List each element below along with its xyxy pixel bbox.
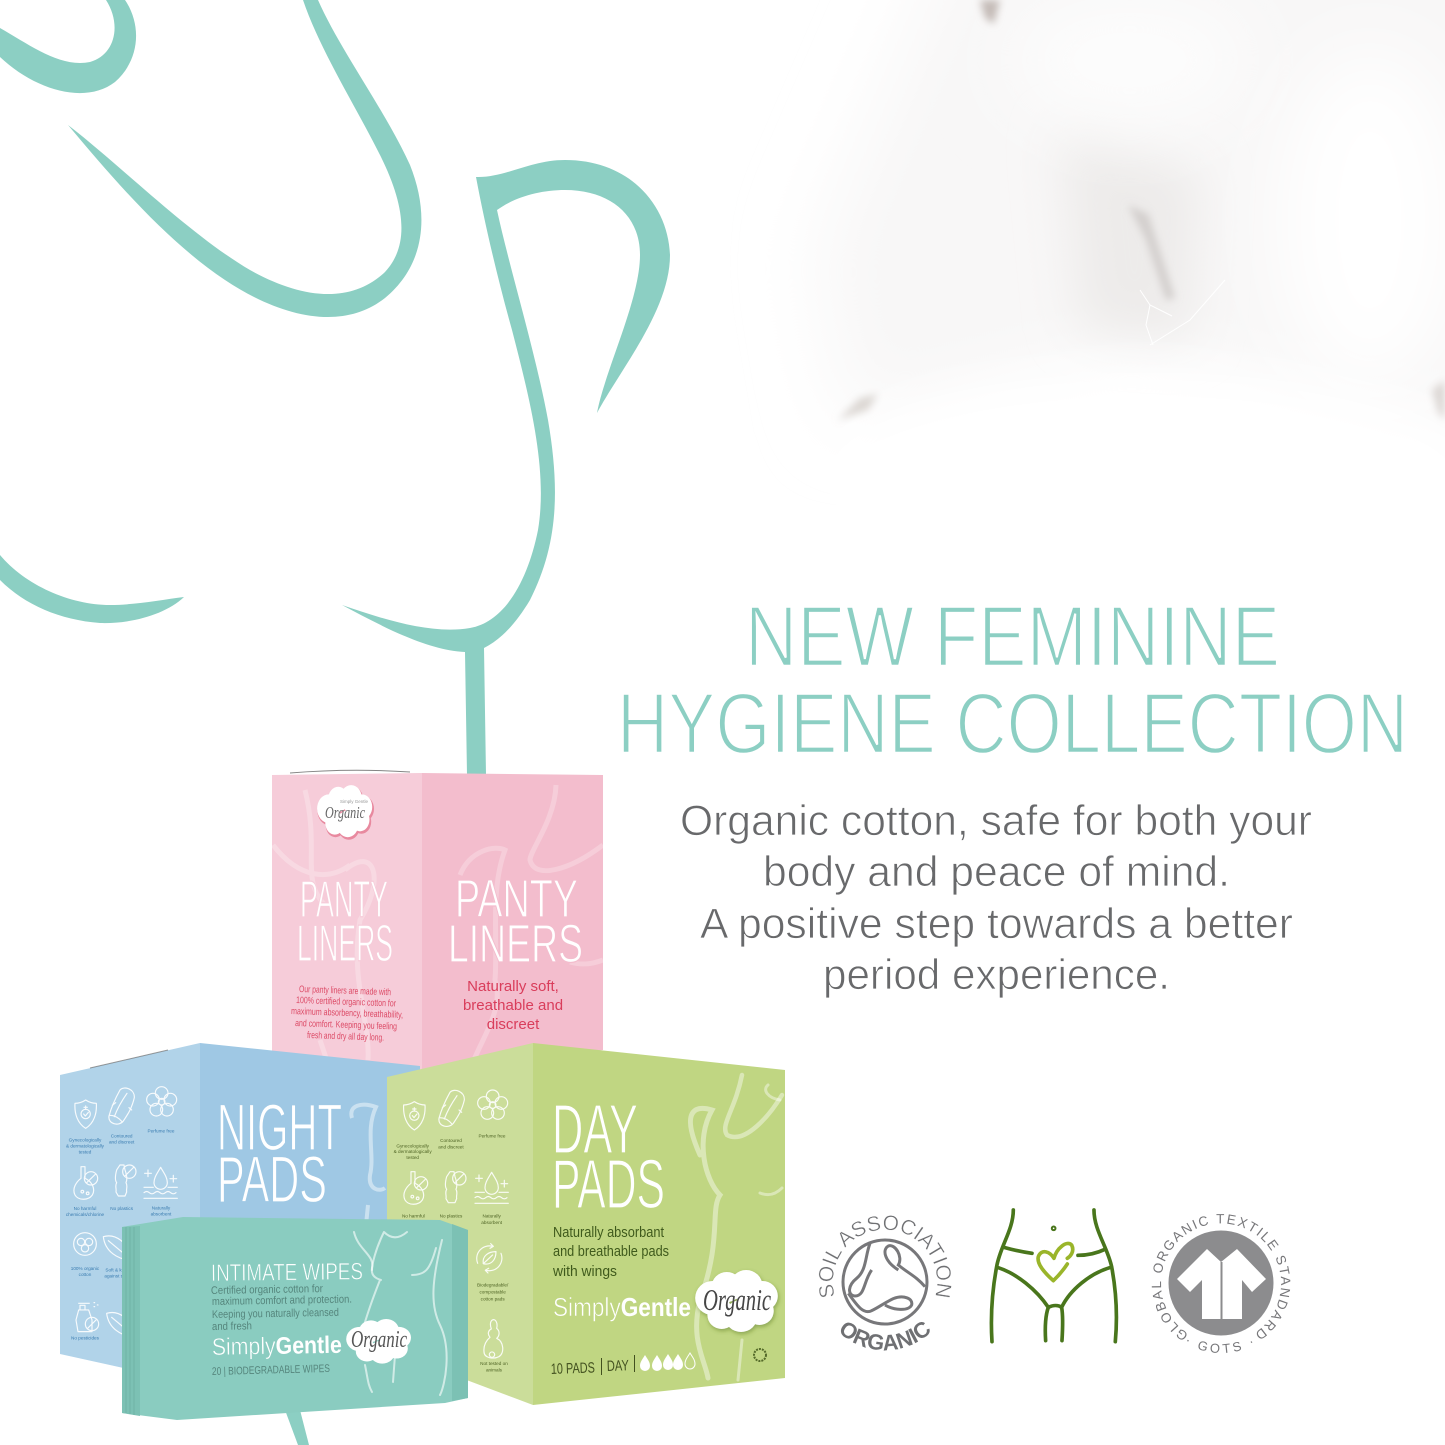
product: intimate wipes pack <box>122 1217 468 1420</box>
product: day pads box: Naturally absorbant <box>553 1224 665 1241</box>
badge: soil association organic <box>818 1215 952 1351</box>
icon grid: green box side: cotton pads <box>481 1297 505 1302</box>
icon grid: blue box side: 100% organic <box>71 1266 100 1271</box>
product: panty liners box: maximum absorbency, breathability, <box>291 1006 403 1021</box>
icon grid: blue box side: No harmful <box>74 1206 96 1211</box>
product: panty liners box <box>272 770 603 1075</box>
product: panty liners box: breathable and <box>463 997 563 1014</box>
icon grid: blue box side: Gynecologically <box>69 1138 102 1143</box>
icon grid: green box side: & dermatologically <box>394 1149 432 1154</box>
product: intimate wipes pack: maximum comfort and protection. <box>212 1294 352 1308</box>
icon grid: blue box side: against skin <box>104 1273 129 1278</box>
icon grid: green box side: and discreet <box>438 1145 464 1150</box>
icon grid: blue box side: No plastics <box>110 1206 134 1211</box>
icon grid: blue box side: No pesticides <box>71 1335 100 1340</box>
product: night pads box <box>60 1043 420 1385</box>
heading: NEW FEMININE <box>745 589 1280 685</box>
icon grid: blue box side: and discreet <box>109 1140 135 1145</box>
icon grid: blue box side: Naturally <box>152 1205 171 1210</box>
product: intimate wipes pack: 20 | BIODEGRADABLE WIPES <box>212 1363 330 1378</box>
product: day pads box: and breathable pads <box>553 1243 669 1260</box>
icon grid: green box side <box>394 1090 509 1373</box>
product: panty liners box: LINERS <box>448 914 583 974</box>
heading <box>617 589 1408 772</box>
icon: organic cloud logo: Organic <box>325 803 365 822</box>
pack info row <box>551 1355 635 1378</box>
product: day pads box: DAY <box>552 1090 638 1168</box>
product: day pads box: with wings <box>552 1263 617 1280</box>
icon grid: blue box side: cotton <box>79 1272 92 1277</box>
icon grid: blue box side: Contoured <box>111 1134 133 1139</box>
icon grid: green box side: animals <box>486 1368 503 1373</box>
icon grid: green box side: Naturally <box>482 1213 502 1218</box>
badge: global organic textile standard: GLOBAL ORGANIC TEXTILE STANDARD <box>1152 1214 1290 1340</box>
icon: soil association mini mark <box>754 1349 766 1361</box>
icon grid: blue box side: Perfume free <box>148 1129 175 1134</box>
product: intimate wipes pack: Keeping you naturally cleansed <box>212 1307 339 1321</box>
product: intimate wipes pack: Certified organic cotton for <box>211 1283 323 1297</box>
product: panty liners box: Our panty liners are made with <box>299 984 391 998</box>
icon grid: green box side: Perfume free <box>479 1133 506 1138</box>
icon: organic cloud logo: Organic <box>703 1282 771 1317</box>
product: intimate wipes pack: SimplyGentle <box>212 1332 342 1361</box>
icon: organic cloud logo <box>346 1319 411 1364</box>
product: day pads box <box>387 1043 785 1405</box>
icon grid: green box side: absorbent <box>481 1220 503 1225</box>
icon grid: blue box side: Soft & kind <box>105 1268 128 1273</box>
body copy: A positive step towards a better <box>700 900 1293 948</box>
product: panty liners box: and comfort. Keeping you feeling <box>295 1018 397 1033</box>
icon grid: blue box side: & dermatologically <box>66 1143 105 1148</box>
icon: organic cloud logo: Simply Gentle <box>340 799 369 804</box>
body line illustration <box>0 0 670 1445</box>
icon grid: green box side: Not tested on <box>480 1361 508 1366</box>
icon: organic cloud logo <box>317 785 374 840</box>
body copy: Organic cotton, safe for both your <box>680 797 1312 845</box>
product: panty liners box: Naturally soft, <box>467 978 559 995</box>
icon grid: green box side: No plastics <box>440 1213 463 1218</box>
product: night pads box: NIGHT <box>217 1090 342 1164</box>
badge: soil association organic: ORGANIC <box>840 1322 930 1351</box>
product: panty liners box: 100% certified organic cotton for <box>296 995 396 1009</box>
product: panty liners box: discreet <box>487 1016 540 1033</box>
icon grid: blue box side: chemicals/chlorine <box>66 1212 105 1217</box>
product: day pads box: PADS <box>552 1145 665 1223</box>
product: panty liners box: PANTY <box>300 871 388 929</box>
badge: global organic textile standard: · GOTS · <box>1187 1340 1252 1353</box>
pack info row: DAY <box>607 1357 629 1375</box>
product: panty liners box: PANTY <box>455 869 578 929</box>
icon grid: green box side: No harmful <box>402 1213 425 1218</box>
icon grid: green box side: Biodegradable/ <box>477 1283 509 1288</box>
product: intimate wipes pack: INTIMATE WIPES <box>211 1258 363 1287</box>
icon grid: green box side: Contoured <box>440 1138 462 1143</box>
icon: absorbency drops <box>640 1353 695 1371</box>
product: panty liners box: LINERS <box>297 915 393 973</box>
pack info row: 10 PADS <box>551 1359 595 1378</box>
icon: organic cloud logo: Organic <box>351 1327 407 1353</box>
brand: simply gentle day pads: SimplyGentle <box>553 1292 691 1322</box>
body copy: body and peace of mind. <box>763 848 1230 896</box>
body copy <box>680 797 1312 999</box>
product: panty liners box: fresh and dry all day long. <box>307 1030 384 1044</box>
icon grid: blue box side <box>66 1087 177 1340</box>
body copy: period experience. <box>823 951 1170 999</box>
badge: soil association organic: SOIL ASSOCIATION <box>818 1215 952 1298</box>
icon grid: green box side: tested <box>406 1155 419 1160</box>
product: night pads box: PADS <box>217 1142 327 1216</box>
icon grid: green box side: Gynecologically <box>396 1143 430 1148</box>
icon: underwear heart <box>991 1210 1116 1342</box>
icon: organic cloud logo <box>695 1270 778 1332</box>
product: intimate wipes pack: and fresh <box>212 1320 252 1333</box>
icon grid: green box side: compostable <box>479 1289 506 1294</box>
icon grid: blue box side: tested <box>79 1149 92 1154</box>
icon grid: blue box side: absorbent <box>151 1211 172 1216</box>
